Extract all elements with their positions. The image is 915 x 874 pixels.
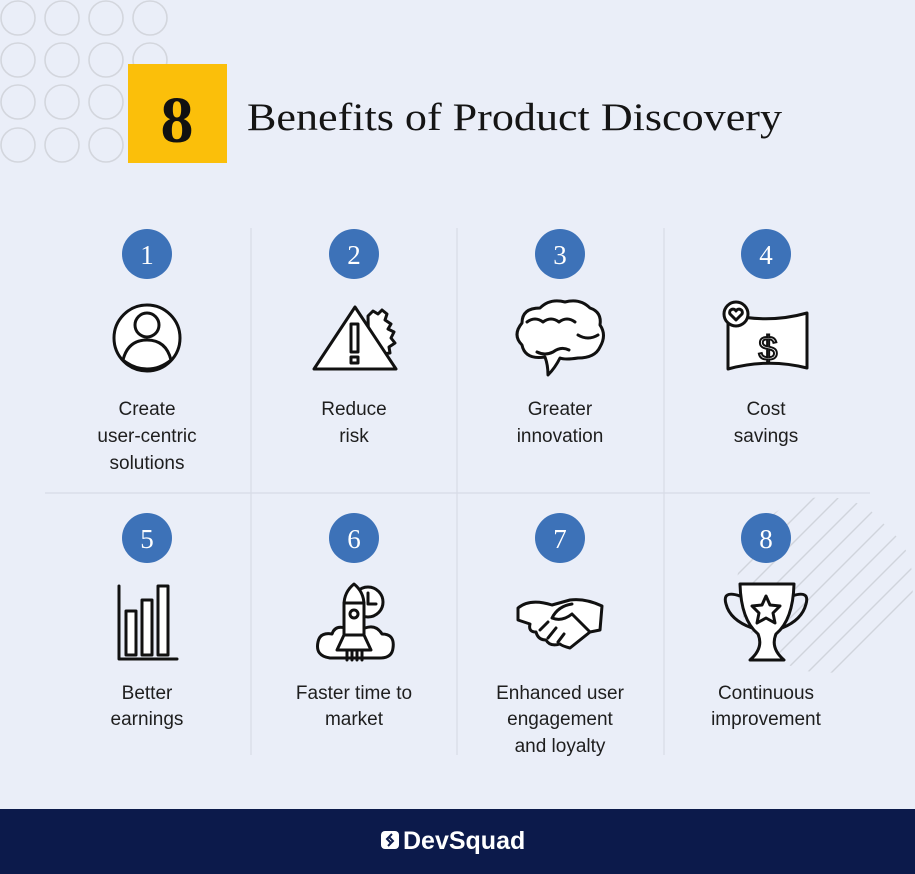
icon: cost savings: $ (759, 330, 778, 368)
labels row 2: Continuous (718, 683, 814, 704)
labels row 2: improvement (711, 709, 822, 730)
labels row 1: solutions (110, 453, 184, 474)
icon: trophy (725, 584, 807, 660)
labels row 1: risk (339, 426, 369, 447)
yellow number badge: 8 (160, 84, 194, 157)
labels row 1: user-centric (97, 426, 197, 447)
icon: brain (517, 301, 604, 375)
footer (0, 809, 915, 874)
labels row 2 (111, 683, 822, 757)
labels row 1: innovation (517, 426, 603, 447)
icon: handshake (518, 600, 602, 648)
labels row 2: Faster time to (296, 683, 412, 704)
footer: DevSquad (403, 827, 525, 855)
labels row 2: earnings (111, 709, 183, 730)
hatch pattern (738, 498, 913, 673)
labels row 1 (97, 399, 798, 474)
number circles: 8 (759, 524, 773, 554)
labels row 1: Greater (528, 399, 593, 420)
number circles: 5 (140, 524, 154, 554)
number circles: 6 (347, 524, 361, 554)
icon: bar chart (119, 586, 177, 659)
labels row 2: Better (122, 683, 173, 704)
icon: user (114, 305, 180, 371)
number circles (122, 229, 791, 563)
title: Benefits of Product Discovery (247, 96, 783, 139)
number circles: 7 (553, 524, 567, 554)
labels row 1: Cost (746, 399, 786, 420)
labels row 2: market (325, 709, 384, 730)
number circles: 3 (553, 240, 567, 270)
number circles: 1 (140, 240, 154, 270)
decorative circle pattern (1, 1, 167, 162)
labels row 1: Reduce (321, 399, 387, 420)
labels row 2: engagement (507, 709, 614, 730)
labels row 1: Create (118, 399, 176, 420)
labels row 2: and loyalty (515, 736, 606, 757)
labels row 1: savings (734, 426, 798, 447)
icon: risk (314, 307, 396, 369)
icon: rocket (318, 584, 393, 660)
number circles: 2 (347, 240, 361, 270)
number circles: 4 (759, 240, 773, 270)
grid dividers (45, 228, 870, 755)
labels row 2: Enhanced user (496, 683, 625, 704)
icon: cost savings (724, 302, 807, 369)
yellow number badge (128, 64, 227, 163)
